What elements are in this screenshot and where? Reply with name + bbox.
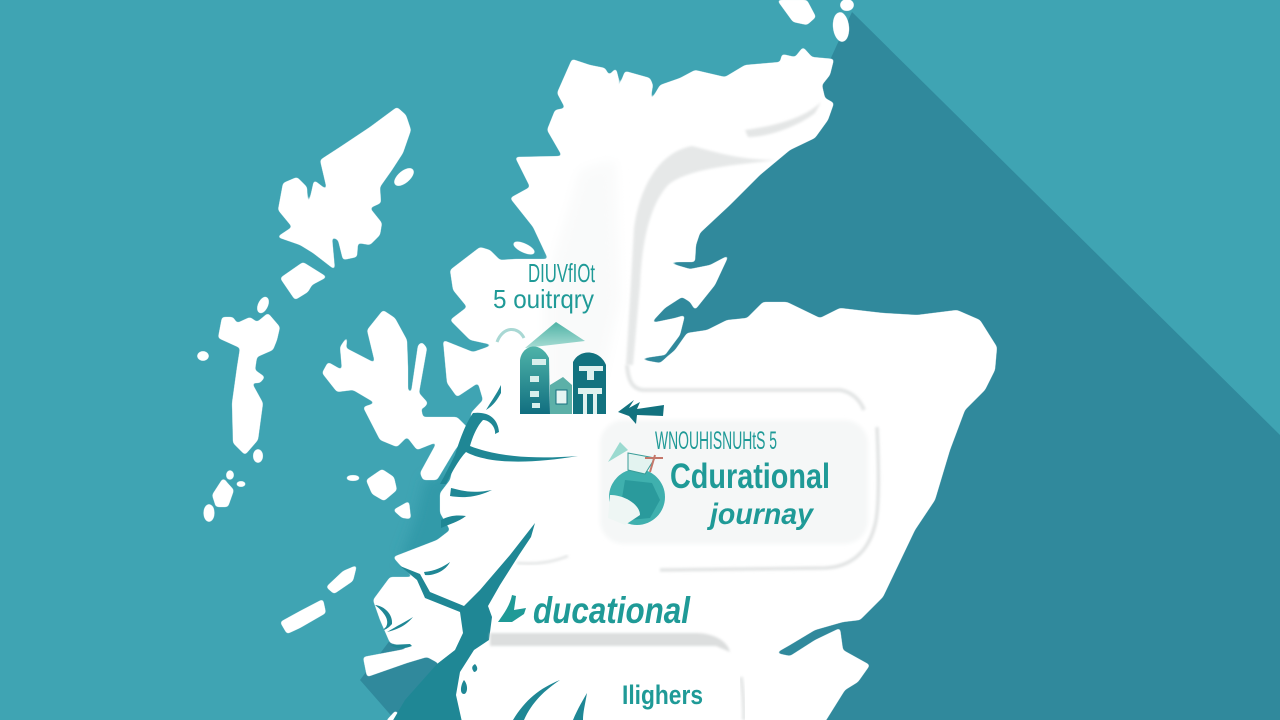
panel title line 2: journay [706,498,814,531]
band: north-south ridge [626,146,775,365]
embossed panel shading [517,102,878,720]
band: lower left [517,556,568,564]
accent squiggle [498,595,526,622]
icon: school buildings [497,322,606,414]
leaf [608,442,628,462]
loch: small notch on peninsula [424,562,450,575]
island: small east [391,165,417,189]
arch [497,329,524,342]
lower label: Ilighers [622,680,703,710]
centre building [550,377,572,414]
loch: bottom curves [513,680,560,720]
roof [525,322,585,348]
mainland [363,47,997,720]
loch: short inlet [450,488,492,497]
islands: Rum, Canna, Eigg [346,469,411,519]
island: Jura [326,565,357,594]
loch: notch near skye [486,385,501,410]
section title: ducational [533,590,691,631]
left tower [520,346,550,414]
arrow pointing left [618,400,664,424]
loch: west branches [440,413,578,484]
band: panel 3 right [741,677,744,720]
panel title line 1: Cdurational [670,457,830,496]
island: Orkney lens [831,11,851,43]
sea lochs [375,385,587,720]
island: Orkney east [840,0,854,11]
island: Islay [280,599,326,634]
small subheading: 5 ouitrqry [493,284,594,314]
island: Orkney [777,0,816,25]
right tower windows [578,366,603,414]
loch: lower inlet [441,515,466,528]
island: Bute fragment [385,710,402,720]
panel heading: WNOUHISNUHtS 5 [655,427,777,455]
centre door [556,390,567,404]
bag top [628,453,655,474]
islands [197,0,854,720]
bag flag [645,455,663,472]
loch: peninsula inner bites [375,605,413,648]
icon: travel bag [608,442,665,525]
band: corner to panel [627,365,864,410]
left tower windows [530,359,546,408]
bag paper [608,495,640,525]
island: small lens [255,295,271,315]
island: north-west lens [511,239,537,257]
island: Lewis [277,107,411,270]
band: north curve [745,102,821,137]
island: Raasay strip [411,342,428,409]
dots around Uist [197,351,263,522]
island: Harris [280,262,327,300]
band: panel 2 outer [660,427,878,570]
loch: Firth of Clyde [392,523,535,720]
panel: educational journey [600,420,868,544]
island: Skye [322,310,470,480]
right tower [573,353,606,414]
small heading: DIUVfIOt [528,258,595,288]
bag body [609,469,665,525]
panel: higher top band [490,633,730,652]
west coast sea shadow [400,470,455,560]
long diagonal shadow [360,12,1280,720]
island: Uist [218,313,280,455]
loch: bottom tip [573,693,587,720]
soft grey west shading [545,160,620,390]
bag inner [622,480,660,520]
loch: spots near Clyde [461,664,477,694]
